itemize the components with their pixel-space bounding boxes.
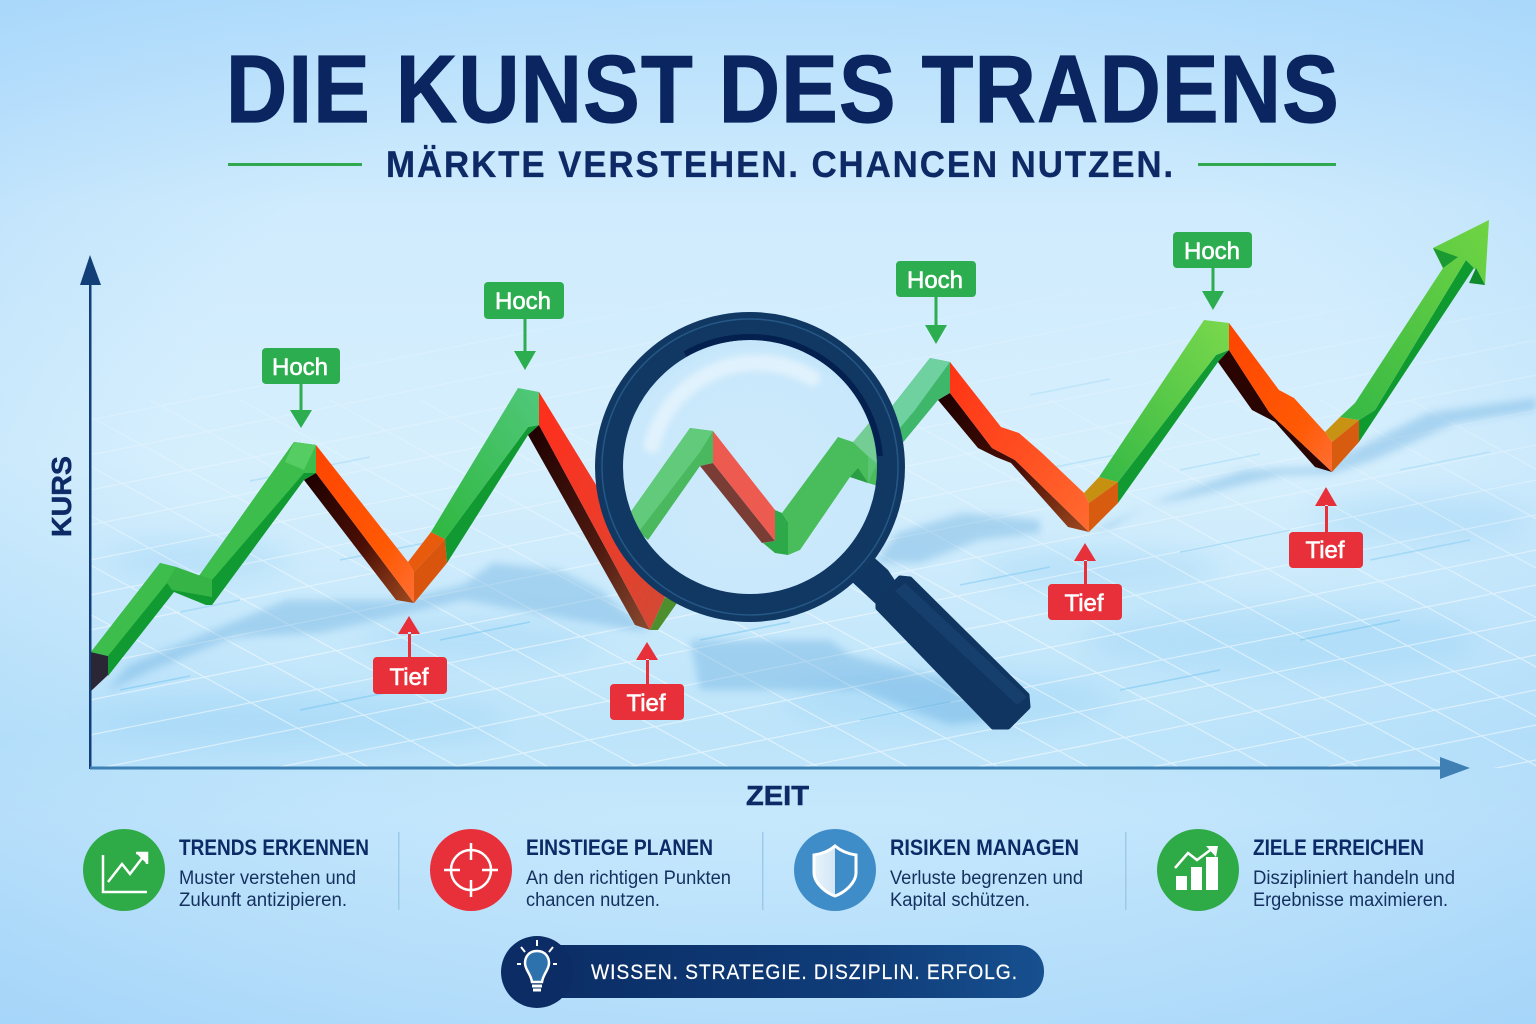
feature: einstiege planen	[430, 829, 731, 911]
marker: Tief 3: Tief	[1064, 590, 1104, 617]
lens glass	[618, 335, 882, 599]
icon: light bulb	[517, 940, 557, 990]
feature: risiken managen: Kapital schützen.	[890, 890, 1030, 911]
rising segment 3 faded	[860, 358, 950, 470]
handle	[850, 552, 1028, 727]
peak and trough markers	[262, 232, 1363, 720]
feature: trends erkennen: Muster verstehen und	[179, 868, 356, 889]
feature: ziele erreichen: Ergebnisse maximieren.	[1253, 890, 1448, 911]
valley 3	[1084, 477, 1118, 532]
marker: Tief 1	[373, 616, 447, 694]
feature: einstiege planen: EINSTIEGE PLANEN	[526, 835, 713, 860]
feature: einstiege planen: chancen nutzen.	[526, 890, 660, 911]
title: DIE KUNST DES TRADENS	[226, 36, 1340, 143]
marker: Hoch 2	[484, 282, 564, 370]
marker: Tief 4: Tief	[1305, 537, 1345, 564]
marker: Hoch 4	[1173, 232, 1252, 310]
valley 1	[408, 532, 447, 603]
falling segment 3	[938, 362, 1089, 532]
background floor patches	[90, 496, 1530, 746]
y axis label: KURS	[46, 456, 77, 537]
marker: Hoch 1: Hoch	[272, 354, 328, 381]
marker: Hoch 4: Hoch	[1184, 238, 1240, 265]
background floor grid	[92, 340, 1536, 768]
feature: trends erkennen: Zukunft antizipieren.	[179, 890, 347, 911]
rising segment 1	[91, 442, 316, 676]
subtitle with side rules: MÄRKTE VERSTEHEN. CHANCEN NUTZEN.	[386, 144, 1175, 185]
magnified chart	[631, 423, 877, 555]
price line chart	[91, 220, 1489, 691]
feature: ziele erreichen	[1157, 829, 1455, 911]
lens highlight	[652, 363, 812, 445]
falling segment 1	[304, 445, 414, 603]
feature: risiken managen: Verluste begrenzen und	[890, 868, 1083, 889]
icon: trend chart	[103, 853, 147, 892]
x axis label: ZEIT	[746, 780, 809, 811]
lens ring	[602, 319, 898, 615]
falling segment 2	[528, 392, 677, 630]
feature: einstiege planen: An den richtigen Punkten	[526, 868, 731, 889]
icon: shield	[814, 846, 856, 896]
motto banner: WISSEN. STRATEGIE. DISZIPLIN. ERFOLG.	[591, 961, 1018, 984]
final rising arrow	[1340, 220, 1489, 442]
valley 4	[1325, 417, 1359, 472]
marker: Hoch 2: Hoch	[495, 288, 551, 315]
feature: trends erkennen: TRENDS ERKENNEN	[179, 835, 369, 860]
feature: ziele erreichen: ZIELE ERREICHEN	[1253, 835, 1424, 860]
dividers	[398, 832, 1126, 910]
marker: Tief 3	[1048, 543, 1122, 620]
marker: Hoch 3	[896, 261, 976, 344]
marker: Tief 2: Tief	[626, 690, 666, 717]
marker: Tief 1: Tief	[389, 664, 429, 691]
x axis with arrow	[90, 757, 1470, 779]
start cap	[91, 652, 108, 691]
marker: Tief 4	[1289, 487, 1363, 568]
marker: Hoch 3: Hoch	[907, 267, 963, 294]
marker: Hoch 1	[262, 348, 340, 428]
feature: risiken managen	[794, 829, 1083, 911]
rising segment 4	[1099, 320, 1229, 503]
y axis with arrow	[80, 255, 101, 769]
feature: risiken managen: RISIKEN MANAGEN	[890, 835, 1079, 860]
falling segment 4	[1218, 323, 1332, 472]
chart shadows on the floor	[107, 398, 1536, 725]
magnifying glass	[602, 319, 1028, 727]
icon: growth bars	[1175, 846, 1218, 890]
rising segment 2	[431, 388, 539, 563]
icon: target crosshair	[444, 843, 498, 897]
feature: ziele erreichen: Diszipliniert handeln und	[1253, 868, 1455, 889]
feature: trends erkennen	[83, 829, 369, 911]
marker: Tief 2	[610, 642, 684, 720]
motto banner	[501, 936, 1044, 1008]
